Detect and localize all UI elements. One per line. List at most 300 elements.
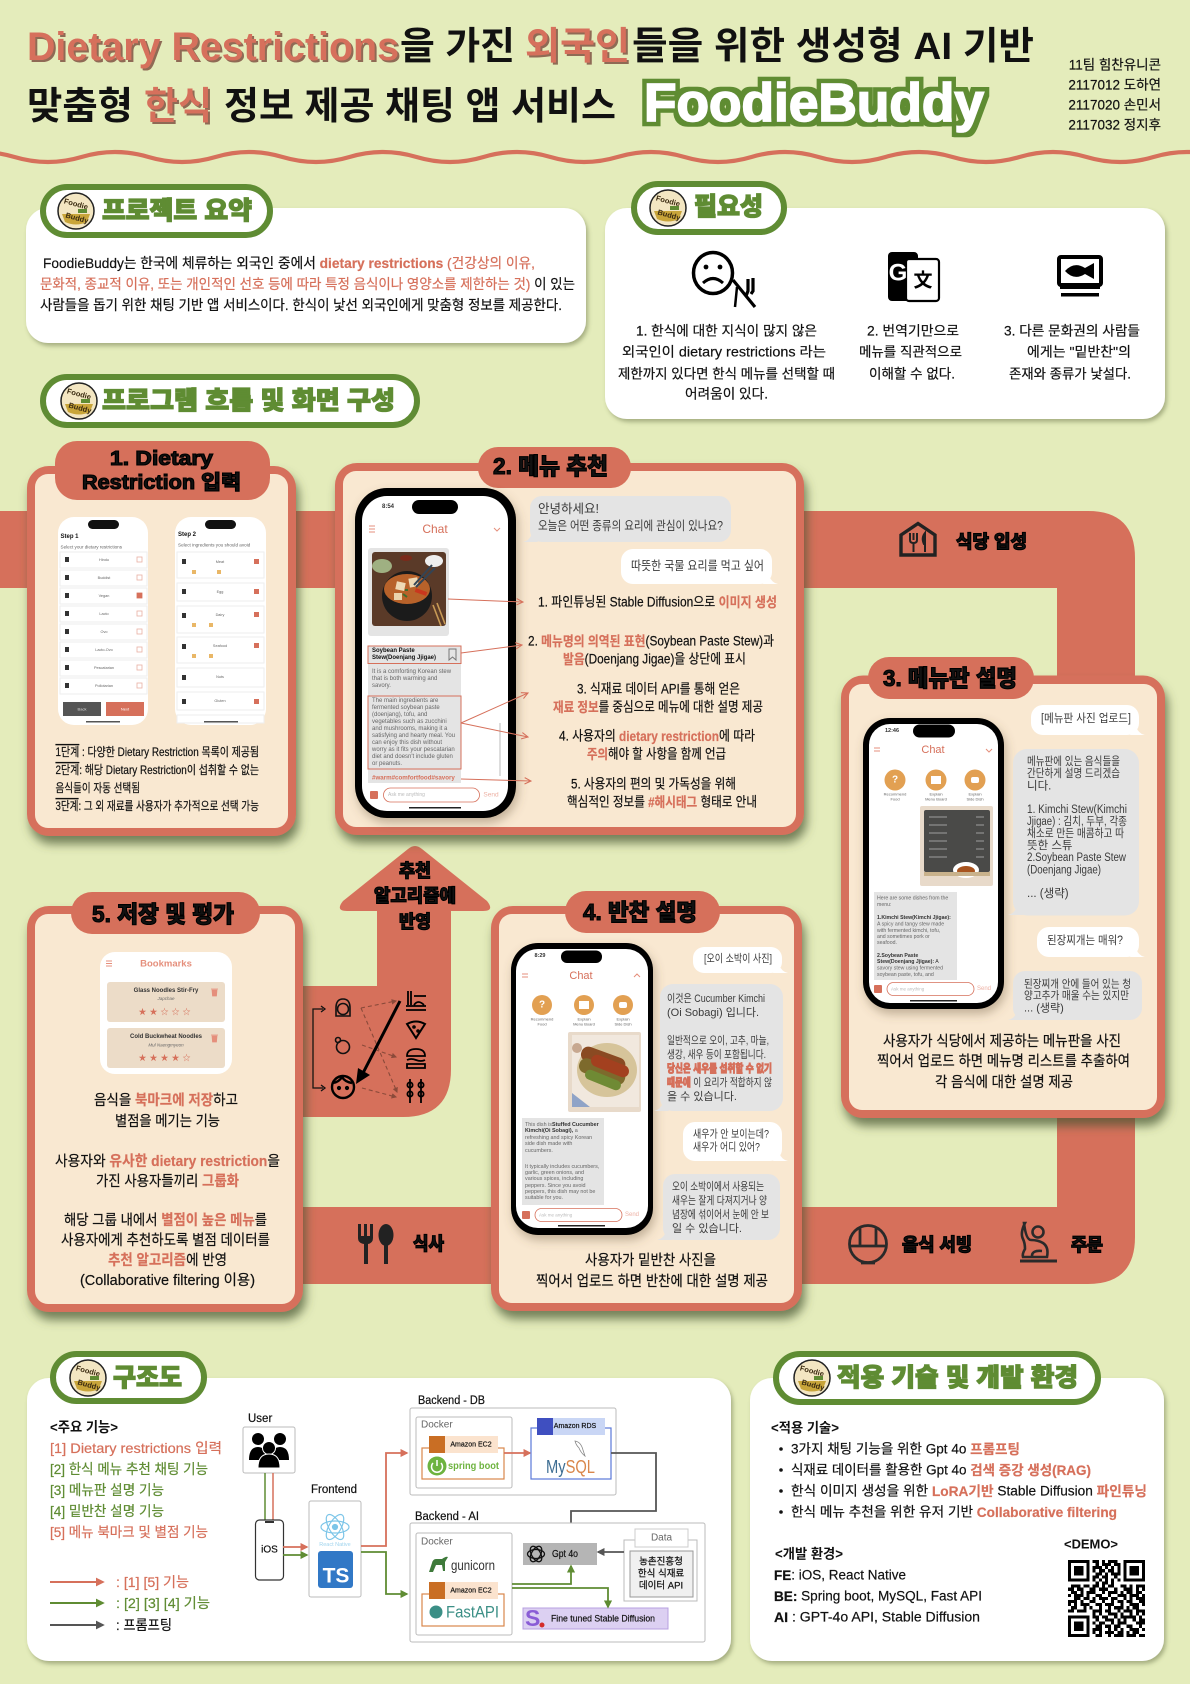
logo: Foodie <box>799 1363 825 1379</box>
menu answer bubble: A spicy and tangy stew made <box>877 922 944 928</box>
arrow label: 반영 <box>399 912 431 932</box>
diagram: iOS device <box>256 1473 284 1580</box>
menu answer bubble: menu: <box>877 902 891 908</box>
menu answer bubble: and sometimes pork or <box>877 934 930 940</box>
arrow label: 추천 <box>399 861 431 881</box>
need 3 text: 존재와 종류가 낯설다. <box>1009 366 1131 382</box>
team members: 2117012 도하연 <box>1068 78 1161 92</box>
team members: 2117032 정지후 <box>1068 118 1161 132</box>
bubble: assistant greeting: 안녕하세요! <box>538 502 599 516</box>
caption: 사용자가 식당에서 제공하는 메뉴판을 사진 <box>883 1033 1121 1050</box>
heading pill: 필요성: 필요성 <box>694 193 763 221</box>
bubble: menu explanation: (Doenjang Jigae) <box>1027 865 1101 877</box>
phone: step 1: Pollotarian <box>95 684 113 688</box>
title: 정보 제공 채팅 앱 서비스 <box>224 86 616 128</box>
panel 5: save and rate <box>27 892 303 1312</box>
explanation list: 발음(Doenjang Jigae)을 상단에 표시 <box>563 652 746 666</box>
ingredients highlight: satisfying and hearty meal. You <box>372 733 455 739</box>
message background <box>368 646 461 783</box>
phone: side dish: 8:29 <box>534 953 546 959</box>
bubble: assistant greeting <box>523 496 731 542</box>
message description: It is a comforting Korean stew <box>372 669 452 675</box>
band label: 음식 서빙: 음식 서빙 <box>902 1235 972 1255</box>
phone: step 1: Back <box>78 706 86 712</box>
phone: step 2: Egg <box>217 590 223 594</box>
applied technology list: 3가지 채팅 기능을 위한 Gpt 4o 프롬프팅 <box>791 1442 1020 1456</box>
heading: 2. 메뉴 추천 <box>493 453 608 479</box>
bubble: menu explanation: 2.Soybean Paste Stew <box>1027 852 1127 864</box>
ingredients highlight: diet and doesn't include gluten <box>372 754 453 760</box>
stable diffusion: Fine tuned Stable Diffusion <box>551 1614 655 1624</box>
diagram: backend DB <box>410 1395 616 1495</box>
band label: 음식 서빙 <box>850 1226 972 1263</box>
quick action buttons: ? <box>892 774 898 786</box>
heading <box>565 891 720 933</box>
phone: step 1: Lacto <box>99 612 109 616</box>
heading pill: 프로젝트 요약: 프로젝트 요약 <box>102 197 252 225</box>
feature list: [2] 한식 메뉴 추천 채팅 기능 <box>50 1461 208 1477</box>
dish answer bubble: refreshing and spicy Korean <box>525 1135 592 1141</box>
menu title highlight: Stew(Doenjang Jjigae) <box>372 655 436 661</box>
description: 사용자와 유사한 dietary restriction을 <box>55 1153 280 1170</box>
applied technology list <box>771 1420 1147 1520</box>
need 2 text: 이해할 수 없다. <box>869 366 955 382</box>
bubble: shrimp answer: 념장에 섞이어서 눈에 안 보 <box>672 1208 769 1221</box>
explanation list: 2. 메뉴명의 의역된 표현(Soybean Paste Stew)과 <box>528 634 774 648</box>
explanation list <box>528 594 777 810</box>
title: Dietary Restrictions <box>27 25 399 69</box>
feature list: [1] Dietary restrictions 입력 <box>50 1440 222 1456</box>
development environment list: AI : GPT-4o API, Stable Diffusion <box>774 1610 980 1624</box>
message description: savory. <box>372 683 391 689</box>
icon: fish menu <box>1059 257 1101 296</box>
heading: 3. 메뉴판 설명 <box>883 665 1017 691</box>
dish answer bubble: peppers, this dish may not be <box>525 1189 595 1195</box>
EC2 FastAPI: Amazon EC2 <box>450 1588 492 1594</box>
need 2 text: 메뉴를 직관적으로 <box>859 344 962 360</box>
data source: 한식 식재료 <box>638 1568 684 1580</box>
icon: main user <box>332 1076 354 1098</box>
quick action buttons <box>884 770 986 802</box>
arrows inside AI backend <box>512 1552 624 1607</box>
explanation list: 3. 식재료 데이터 API를 통해 얻은 <box>577 682 740 696</box>
heading: Restriction 입력 <box>82 471 241 494</box>
phone: menu board: Chat <box>921 744 945 756</box>
title: 들을 위한 생성형 AI 기반 <box>632 26 1034 68</box>
logo <box>650 190 686 226</box>
feature list: [4] 밑반찬 설명 기능 <box>50 1503 164 1519</box>
phone: step 2: Nuts <box>216 675 224 679</box>
uploaded menu photo <box>920 806 993 886</box>
bubble: shrimp answer: 일 수 있습니다. <box>672 1221 742 1235</box>
step captions <box>56 745 259 813</box>
recommendation arrows <box>361 1001 397 1097</box>
applied technology list: 한식 메뉴 추천을 위한 유저 기반 Collaborative filtering <box>791 1504 1117 1520</box>
feature list <box>50 1419 222 1540</box>
logo: Foodie <box>75 1363 101 1379</box>
description: (Collaborative filtering 이용) <box>80 1272 255 1289</box>
need 1 text <box>618 324 835 402</box>
phone: menu board <box>863 718 1004 1009</box>
heading pill: 프로그램 흐름 및 화면 구성: 프로그램 흐름 및 화면 구성 <box>102 387 395 415</box>
food image: stew <box>372 552 446 626</box>
caption <box>877 1033 1130 1091</box>
chat input: Ask me anything <box>539 1212 573 1218</box>
chat input: Send <box>625 1212 639 1218</box>
explanation list: 주의해야 할 사항을 함께 언급 <box>587 746 726 762</box>
chat input: Ask me anything <box>891 986 925 992</box>
bookmarks screen: Bookmarks <box>140 958 192 970</box>
heading <box>478 447 631 488</box>
bubble: side dish explanation: 때문에 이 요리가 적합하지 않 <box>667 1075 772 1089</box>
development environment list: <개발 환경> <box>775 1546 843 1562</box>
need 3 text: 3. 다른 문화권의 사람들 <box>1004 324 1140 338</box>
bookmarks screen: ★★★★☆ <box>138 1054 194 1062</box>
heading: 1. Dietary <box>110 448 214 470</box>
phone: step 1: Pescatarian <box>94 666 114 670</box>
bubble: spiciness answer <box>1008 971 1142 1020</box>
phone: menu board: 12:46 <box>885 728 899 734</box>
dish answer bubble: It typically includes cucumbers, <box>525 1164 600 1170</box>
logo: Foodie <box>63 196 89 212</box>
heading: 5. 저장 및 평가 <box>92 901 234 927</box>
bubble: user shrimp question <box>683 1122 788 1161</box>
bubble: user shrimp question: 새우가 어디 있어? <box>693 1141 760 1154</box>
step captions: 1단계 : 다양한 Dietary Restriction 목록이 제공됨 <box>56 745 259 759</box>
description: 가진 사용자들끼리 그룹화 <box>96 1173 239 1190</box>
quick action buttons: Recommend <box>884 792 906 796</box>
logo <box>58 193 94 229</box>
bookmarks screen: Mul Naengmyeon <box>148 1042 184 1048</box>
diagram: frontend <box>309 1484 361 1597</box>
arrow label: 알고리즘에 <box>374 886 456 906</box>
chat input: Send <box>483 792 499 798</box>
quick action buttons: Food <box>890 796 900 802</box>
ingredients highlight <box>368 696 461 769</box>
logo: Buddy <box>68 401 93 416</box>
team members: 11팀 힘찬유니콘 <box>1069 58 1161 72</box>
description <box>55 1092 280 1289</box>
quick action buttons: Side Dish <box>614 1022 632 1026</box>
EC2 spring boot: spring boot <box>448 1460 499 1472</box>
step captions: 3단계: 그 외 재료를 사용자가 추가적으로 선택 가능 <box>56 799 259 813</box>
need 3 text: 에게는 "밑반찬"의 <box>1027 344 1131 360</box>
band label: 주문 <box>1020 1223 1103 1261</box>
feature list: [5] 메뉴 북마크 및 별점 기능 <box>50 1524 208 1540</box>
bubble: shrimp answer: 새우는 잘게 다져지거나 양 <box>672 1194 767 1207</box>
heading pill: 프로그램 흐름 및 화면 구성 <box>43 377 417 425</box>
data source: 농촌진흥청 <box>639 1556 683 1568</box>
connector arrows <box>448 599 531 781</box>
icon: user grandmother <box>336 1038 350 1054</box>
heading pill: 적용 기술 및 개발 환경: 적용 기술 및 개발 환경 <box>837 1364 1078 1392</box>
need 1 text: 제한까지 있다면 한식 메뉴를 선택할 때 <box>618 366 835 382</box>
chat input <box>370 788 499 808</box>
diagram: frontend: React Native <box>319 1542 351 1548</box>
phone: step 1: Next <box>121 706 130 712</box>
chat input: Ask me anything <box>388 792 425 798</box>
bookmarks screen: Japchae <box>156 996 175 1001</box>
bookmarks screen: Cold Buckwheat Noodles <box>130 1034 203 1040</box>
wave divider <box>0 152 1190 162</box>
dish answer bubble <box>522 1118 604 1205</box>
description: 추천 알고리즘에 반영 <box>108 1252 227 1269</box>
icon: translate: 文 <box>913 270 933 292</box>
bubble: user question: 된장찌개는 매워? <box>1047 934 1123 947</box>
logo: Buddy <box>801 1378 826 1393</box>
quick action buttons: Menu Board <box>573 1022 595 1026</box>
diagram: backend AI <box>410 1511 705 1642</box>
RDS MySQL: MySQL <box>546 1457 595 1477</box>
bubble: side dish explanation: 일반적으로 오이, 고추, 마늘, <box>667 1033 769 1047</box>
diagram: frontend: Frontend <box>311 1484 357 1496</box>
heading pill: 적용 기술 및 개발 환경 <box>776 1354 1098 1402</box>
explanation list: 핵심적인 정보를 #해시태그 형태로 안내 <box>567 794 757 810</box>
explanation list: 재료 정보를 중심으로 메뉴에 대한 설명 제공 <box>553 700 763 714</box>
explanation list: 4. 사용자의 dietary restriction에 따라 <box>559 728 756 744</box>
quick action buttons: Food <box>537 1022 547 1026</box>
gunicorn <box>429 1557 495 1573</box>
logo: Foodie <box>655 193 681 209</box>
data source <box>624 1529 697 1601</box>
icon: pizza <box>407 1022 425 1038</box>
arrow paths: frontend to backends <box>361 1453 407 1594</box>
icon: fork and spoon <box>358 1224 394 1264</box>
phone: step 2: Meat <box>216 560 225 564</box>
band label: 식사 <box>358 1224 444 1264</box>
menu answer bubble: soybean paste, tofu, and <box>877 972 934 978</box>
title: 을 가진 <box>400 26 515 68</box>
bubble: menu explanation: 메뉴판에 있는 음식들을 <box>1027 755 1120 768</box>
bubble: side dish explanation: (Oi Sobagi) 입니다. <box>667 1006 759 1019</box>
logo: Buddy <box>77 1378 102 1393</box>
quick action buttons: ? <box>539 1000 545 1010</box>
panel: technologies and environment <box>750 1354 1164 1661</box>
title <box>27 25 1034 128</box>
icon: translate <box>888 252 939 301</box>
summary text: 문화적, 종교적 이유, 또는 개인적인 선호 등에 따라 특정 음식이나 영양소를 제한하는 것) 이 있는 <box>40 276 575 292</box>
caption: 각 음식에 대한 설명 제공 <box>935 1074 1073 1091</box>
applied technology list: 식재료 데이터를 활용한 Gpt 4o 검색 증강 생성(RAG) <box>791 1462 1091 1478</box>
quick action buttons: Explain <box>577 1016 591 1022</box>
band label: 식당 입성: 식당 입성 <box>956 532 1027 552</box>
flow band <box>0 511 1135 1284</box>
ingredients highlight: and mushrooms, making it a <box>372 726 448 732</box>
development environment list <box>774 1546 982 1624</box>
menu answer bubble: 1.Kimchi Stew(Kimchi Jjigae): <box>877 915 951 921</box>
description: 음식을 북마크에 저장하고 <box>94 1092 238 1109</box>
phone: step 1: Select your dietary restrictions <box>60 544 123 550</box>
data source: Data <box>651 1532 672 1544</box>
ingredients highlight: The main ingredients are <box>372 698 439 704</box>
bubble: menu explanation: ... (생략) <box>1027 887 1069 900</box>
bubble: user shrimp question: 새우가 안 보이는데? <box>693 1128 769 1141</box>
ingredients highlight: fermented soybean paste <box>372 705 440 711</box>
EC2 FastAPI <box>422 1582 504 1626</box>
chat input: Send <box>977 986 991 992</box>
quick action buttons: Recommend <box>531 1016 553 1022</box>
bubble: side dish explanation: 생강, 새우 등이 포함됩니다. <box>667 1048 766 1061</box>
menu title highlight <box>368 646 461 664</box>
quick action buttons: Explain <box>968 792 982 796</box>
bubble: menu explanation: 니다. <box>1027 780 1051 792</box>
uploaded kimchi photo <box>568 1032 641 1112</box>
bubble: assistant greeting: 오늘은 어떤 종류의 요리에 관심이 있나요? <box>538 519 723 533</box>
EC2 spring boot <box>422 1436 504 1479</box>
logo: Buddy <box>657 208 682 223</box>
phone: step 1 <box>58 517 148 725</box>
dish answer bubble: side dish made with <box>525 1141 572 1147</box>
logo <box>794 1360 830 1396</box>
stable diffusion: S <box>525 1605 540 1631</box>
diagram: iOS device: iOS <box>261 1544 278 1556</box>
band label: 식당 입성 <box>901 524 1027 555</box>
panel: project summary <box>26 187 586 343</box>
RDS MySQL <box>531 1418 611 1479</box>
development environment list: FE: iOS, React Native <box>774 1568 906 1582</box>
data source: 데이터 API <box>639 1580 683 1592</box>
bubble: shrimp answer: 오이 소박이에서 사용되는 <box>672 1180 764 1193</box>
logo <box>61 383 97 419</box>
phone: chat recommendation: 8:54 <box>382 504 395 510</box>
menu answer bubble: Stew(Doenjang Jjigae): A <box>877 959 939 965</box>
icon: react <box>321 1512 349 1542</box>
summary text: 사람들을 돕기 위한 채팅 기반 앱 서비스이다. 한식이 낯선 외국인에게 맞춤형 정보를 제공한다. <box>40 297 562 313</box>
bookmarks screen: Glass Noodles Stir-Fry <box>134 988 199 994</box>
bubble: spiciness answer: 된장찌개 안에 들어 있는 청 <box>1024 978 1131 990</box>
hashtags: #warm#comfortfood#savory <box>372 774 455 782</box>
diagram: backend AI: Backend - AI <box>415 1511 479 1523</box>
heading <box>71 892 260 934</box>
description: 해당 그룹 내에서 별점이 높은 메뉴를 <box>64 1212 267 1229</box>
bubble: user question <box>1037 927 1145 957</box>
heading pill: 구조도 <box>53 1354 204 1401</box>
phone: side dish <box>511 943 653 1235</box>
phone: step 1: Lacto-Ovo <box>95 648 113 652</box>
explanation list: 5. 사용자의 편의 및 가독성을 위해 <box>571 776 736 792</box>
feature list: [3] 메뉴판 설명 기능 <box>50 1482 164 1498</box>
menu answer bubble: seafood. <box>877 940 897 946</box>
icon: noodles <box>406 991 426 1010</box>
caption: 사용자가 밑반찬 사진을 <box>585 1252 716 1269</box>
feature list: <주요 기능> <box>50 1419 118 1435</box>
bubble: side dish explanation: 이것은 Cucumber Kimchi <box>667 992 765 1005</box>
bubble: side dish explanation: 을 수 있습니다. <box>667 1090 737 1103</box>
GPT <box>523 1543 597 1565</box>
phone: step 2: Step 2 <box>178 532 197 538</box>
phone: chat recommendation: Chat <box>422 522 448 536</box>
summary text: FoodieBuddy는 한국에 체류하는 외국인 중에서 dietary restrictions (건강상의 이유, <box>43 255 535 271</box>
phone: step 2: Select ingredients you should avoid <box>178 542 251 548</box>
icon: person ordering <box>1020 1223 1057 1261</box>
heading: 4. 반찬 설명 <box>583 899 697 925</box>
step captions: 2단계: 해당 Dietary Restriction이 섭취할 수 없는 <box>56 763 259 777</box>
logo: Buddy <box>65 211 90 226</box>
menu answer bubble: Here are some dishes from the <box>877 896 948 902</box>
development environment list: BE: Spring boot, MySQL, Fast API <box>774 1588 982 1604</box>
dish answer bubble: various spices, including <box>525 1176 583 1182</box>
bubble: menu explanation: 간단하게 설명 드리겠습 <box>1027 766 1120 780</box>
panel 1: dietary restriction input <box>27 441 296 836</box>
legend: : 프롬프팅 <box>116 1617 172 1633</box>
QR code <box>1068 1562 1145 1635</box>
arrow path: database to GPT <box>571 1453 656 1541</box>
diagram: user <box>243 1413 295 1473</box>
message description: that is both warming and <box>372 676 437 682</box>
panel 3: menu board explanation <box>841 657 1165 1118</box>
icon: burger <box>407 1049 425 1068</box>
description: 별점을 메기는 기능 <box>115 1113 220 1130</box>
need 1 text: 외국인이 dietary restrictions 라는 <box>622 344 826 360</box>
bubble: menu upload: [메뉴판 사진 업로드] <box>1041 712 1131 725</box>
collaborative filtering diagram <box>313 991 426 1103</box>
phone: step 2 <box>175 517 266 725</box>
bubble: spiciness answer: ... (생략) <box>1024 1002 1064 1015</box>
diagram: backend AI: Docker <box>421 1536 453 1548</box>
team members: 2117020 손민서 <box>1068 98 1161 112</box>
step captions: 음식들이 자동 선택됨 <box>56 781 140 795</box>
quick action buttons: Explain <box>616 1016 630 1022</box>
ingredients highlight: worry as it fits your pescatarian <box>371 747 455 753</box>
menu answer bubble <box>874 892 957 980</box>
bubble: menu explanation: 뜻한 스튜 <box>1027 839 1073 852</box>
bubble: side dish explanation <box>654 984 783 1111</box>
explanation list: 1. 파인튜닝된 Stable Diffusion으로 이미지 생성 <box>538 594 777 610</box>
menu answer bubble: 2.Soybean Paste <box>877 953 918 959</box>
phone: step 1: Buddist <box>98 576 111 580</box>
logo <box>70 1360 106 1396</box>
gunicorn: gunicorn <box>451 1557 495 1573</box>
need 2 text <box>859 324 962 382</box>
phone: step 2: Seafood <box>213 644 227 648</box>
diagram: user: User <box>248 1413 272 1425</box>
caption: 찍어서 업로드 하면 메뉴명 리스트를 추출하여 <box>877 1053 1130 1070</box>
panel: architecture <box>27 1354 731 1661</box>
need 1 text: 1. 한식에 대한 지식이 많지 않은 <box>636 324 817 338</box>
phone: step 1: Step 1 <box>60 534 79 540</box>
bubble: shrimp answer <box>657 1174 780 1240</box>
panel 2: menu recommendation <box>335 447 804 835</box>
phone: chat recommendation <box>355 488 516 818</box>
ingredients highlight: vegetables such as zucchini <box>372 719 447 725</box>
bubble: user request <box>621 549 778 584</box>
message description <box>372 669 452 689</box>
panel 4: side dish explanation <box>491 891 802 1311</box>
dish answer bubble: garlic, green onions, and <box>525 1170 584 1176</box>
quick action buttons <box>531 995 633 1026</box>
icon: restaurant <box>901 524 935 555</box>
summary text <box>40 255 575 313</box>
legend <box>50 1574 210 1633</box>
demo label: <DEMO> <box>1064 1536 1118 1552</box>
bubble: menu explanation: Jjigae) : 김치, 두부, 각종 <box>1027 815 1127 828</box>
bubble: menu explanation: 1. Kimchi Stew(Kimchi <box>1027 804 1127 816</box>
phone: step 1: Ovo <box>101 630 107 634</box>
arrow: recommendation feedback <box>300 846 490 1117</box>
dish answer bubble: This dish isStuffed Cucumber <box>525 1122 600 1128</box>
icon: bowl <box>850 1226 886 1263</box>
band label: 식사: 식사 <box>413 1234 444 1254</box>
applied technology list: 한식 이미지 생성을 위한 LoRA기반 Stable Diffusion 파인튜닝 <box>791 1484 1147 1498</box>
diagram: backend DB: Backend - DB <box>418 1395 485 1407</box>
menu title highlight: Soybean Paste <box>372 648 415 654</box>
bubble: menu explanation <box>1008 749 1139 916</box>
chat input <box>874 982 991 1002</box>
title: 외국인 <box>525 26 630 68</box>
bubble: spiciness answer: 양고추가 매울 수는 있지만 <box>1024 989 1129 1002</box>
bubble: side dish upload: [오이 소박이 사진] <box>704 952 772 965</box>
icon: sad face with cutlery <box>694 252 755 307</box>
